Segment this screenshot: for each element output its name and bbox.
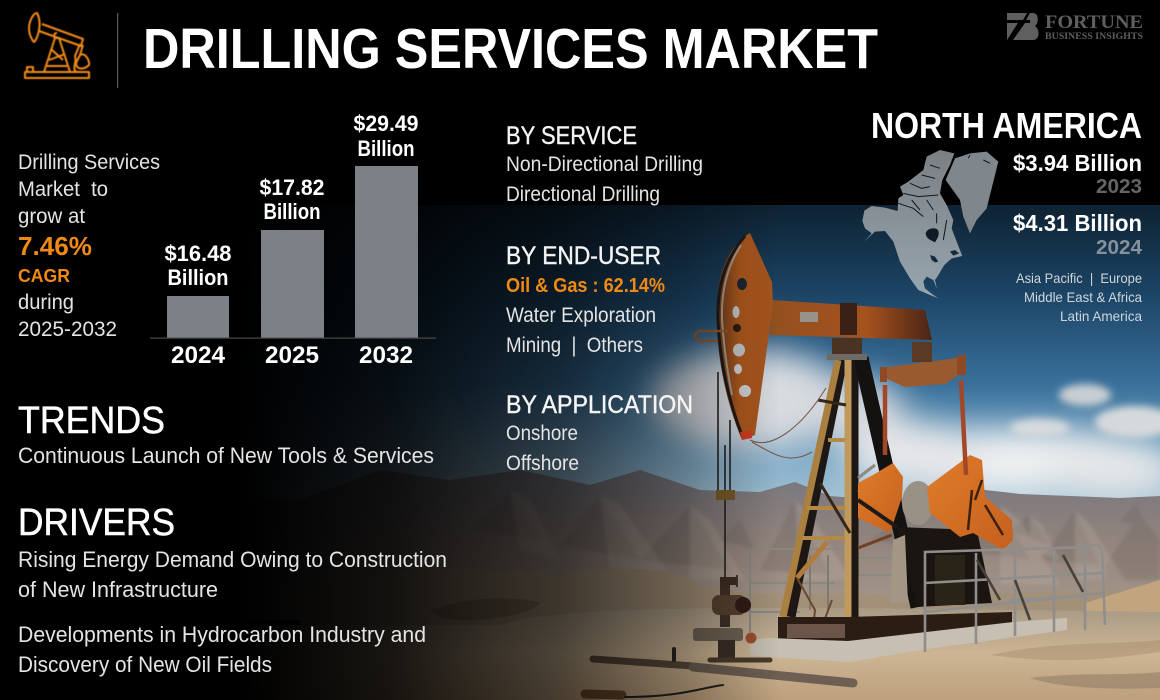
CAGR text block: Market to [18, 178, 108, 201]
bar chart: market size: Billion [168, 265, 228, 290]
segment: by application: BY APPLICATION [506, 391, 693, 419]
drivers [18, 502, 447, 677]
flow pipe [585, 649, 853, 697]
segment: by application [506, 391, 693, 475]
drivers: DRIVERS [18, 502, 175, 544]
trends: Continuous Launch of New Tools & Services [18, 443, 434, 468]
drivers: Discovery of New Oil Fields [18, 652, 272, 677]
bar chart: market size: 2024 [171, 342, 226, 369]
segment: by application: Offshore [506, 452, 579, 475]
segment: by service: Directional Drilling [506, 183, 660, 206]
bar chart: market size: $17.82 [260, 175, 324, 200]
horsehead [717, 233, 773, 440]
bar chart: market size: 2032 [359, 342, 413, 369]
CAGR text block: 7.46% [18, 231, 92, 261]
regional stats: North America: Asia Pacific | Europe [1016, 270, 1142, 286]
walking beam [770, 300, 932, 340]
bar chart: market size [150, 111, 436, 369]
left crank [858, 463, 903, 533]
regional stats: North America [871, 105, 1143, 324]
CAGR text block: during [18, 291, 74, 314]
CAGR text block: CAGR [18, 266, 70, 286]
segment: by service: Non-Directional Drilling [506, 153, 703, 176]
header icon: pump jack [25, 13, 89, 78]
segment: by service [506, 122, 703, 206]
regional stats: North America: 2023 [1096, 176, 1142, 198]
regional stats: North America: $4.31 Billion [1013, 210, 1142, 236]
bearing [832, 338, 862, 355]
CAGR text block: Drilling Services [18, 151, 160, 174]
bar chart: market size: Billion [264, 199, 320, 224]
bar chart: market size: $16.48 [164, 241, 232, 266]
title: DRILLING SERVICES MARKET [143, 17, 878, 81]
CAGR text block: 2025-2032 [18, 318, 117, 341]
bar chart: market size: $29.49 [354, 111, 418, 136]
segment: by end-user: Oil & Gas : 62.14% [506, 275, 665, 297]
segment: by end-user: Water Exploration [506, 304, 656, 327]
drivers: of New Infrastructure [18, 577, 218, 602]
segment: by end-user: BY END-USER [506, 242, 661, 270]
right crank [927, 455, 1013, 550]
concrete pad [750, 618, 1067, 662]
segment: by end-user [506, 242, 665, 357]
CAGR text block [18, 151, 160, 341]
regional stats: North America: 2024 [1096, 237, 1143, 259]
wellhead [693, 575, 756, 658]
bar chart: market size: Billion [358, 136, 414, 161]
drivers: Rising Energy Demand Owing to Construction [18, 547, 447, 572]
header divider [117, 13, 118, 88]
segment: by end-user: Mining | Others [506, 334, 643, 357]
regional stats: North America: Latin America [1060, 308, 1142, 324]
regional stats: North America: $3.94 Billion [1013, 150, 1142, 176]
logo: Fortune Business Insights [1007, 12, 1143, 41]
polish rod and clamp [716, 372, 735, 578]
tower [783, 358, 918, 640]
hub [902, 481, 934, 525]
logo: Fortune Business Insights: FORTUNE [1045, 12, 1143, 33]
rear safety rail [750, 549, 905, 632]
drivers: Developments in Hydrocarbon Industry and [18, 622, 426, 647]
regional stats: North America: Middle East & Africa [1024, 289, 1142, 305]
logo: Fortune Business Insights: BUSINESS INSIGHTS [1045, 31, 1143, 41]
segment: by service: BY SERVICE [506, 122, 637, 150]
pump jack [585, 233, 1105, 697]
trends: TRENDS [18, 400, 165, 442]
safety rail front [925, 545, 1105, 652]
segment: by application: Onshore [506, 422, 578, 445]
CAGR text block: grow at [18, 205, 85, 228]
trends [18, 400, 434, 468]
base skid [778, 612, 1012, 642]
mountain ridges [470, 490, 1160, 585]
gearbox base [897, 527, 992, 607]
bar chart: market size: 2025 [265, 342, 319, 369]
equalizer and links [880, 342, 966, 475]
map: North America [862, 150, 998, 298]
